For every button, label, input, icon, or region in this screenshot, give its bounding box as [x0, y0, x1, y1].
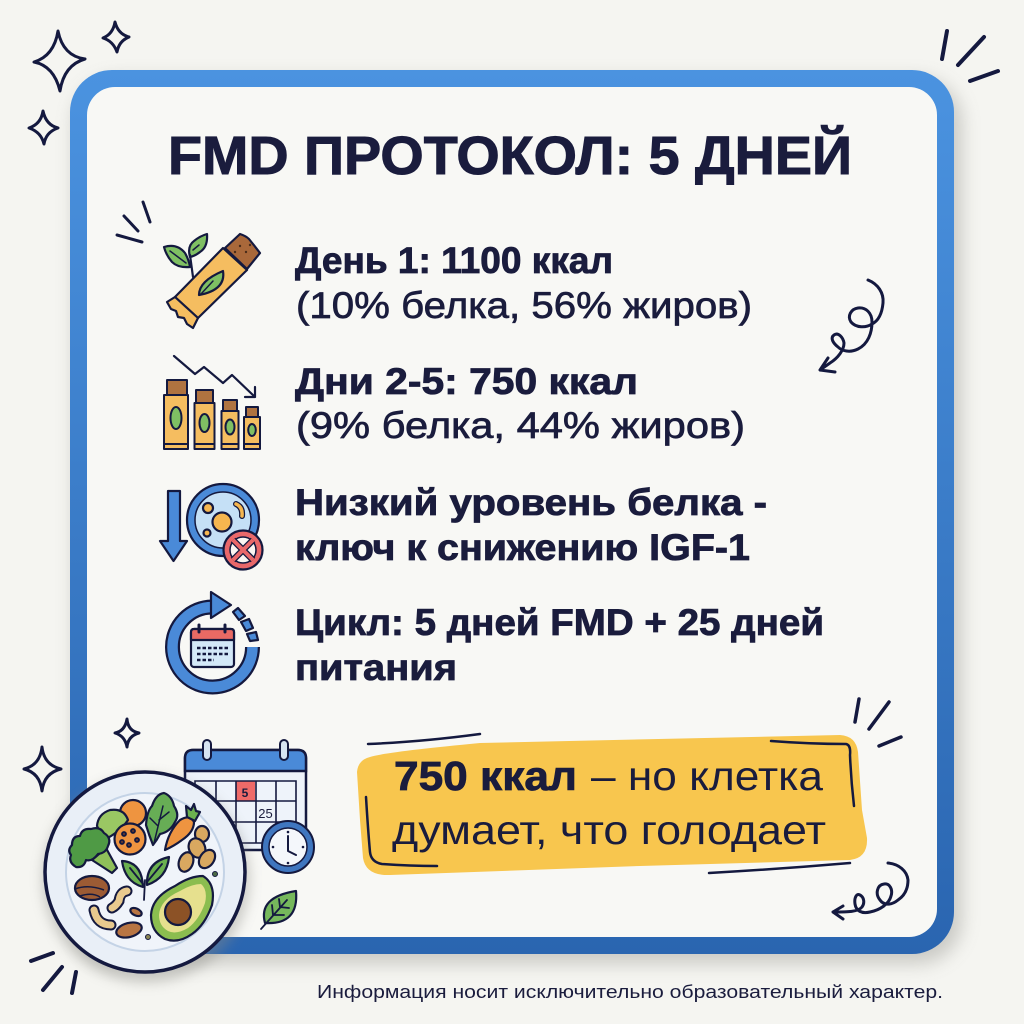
decoration: burst lower left [31, 953, 76, 993]
food: carrot slices and broccoli [69, 800, 146, 873]
icon: snack bar with leaf [164, 234, 260, 328]
food: central leaves [122, 857, 169, 900]
text: low protein: Низкий уровень белка - [295, 482, 767, 523]
callout: highlighted message: думает, что голодает [392, 807, 826, 853]
icon: small leaf [261, 891, 296, 929]
food: beans [176, 826, 218, 874]
icon: wall calendar with clock: 25 [258, 806, 273, 821]
text: days 2-5 [295, 361, 745, 446]
text: days 2-5: Дни 2-5: 750 ккал [295, 361, 638, 402]
decoration: burst near first icon [117, 202, 150, 242]
title: FMD ПРОТОКОЛ: 5 ДНЕЙ [168, 125, 852, 186]
food: leafy green and carrot [146, 793, 200, 850]
icon: descending bars and arrow [164, 356, 260, 449]
callout: highlighted message [357, 734, 867, 875]
decoration: burst near callout [855, 699, 901, 746]
icon: down arrow and cell with cross [160, 484, 262, 570]
text: low protein [295, 482, 767, 568]
icon: wall calendar with clock [185, 740, 314, 873]
food: nuts [75, 872, 218, 940]
text: day 1: День 1: 1100 ккал [295, 240, 613, 281]
icon: plate with food [42, 772, 250, 983]
decoration: sparkles lower left [24, 719, 139, 791]
text: days 2-5: (9% белка, 44% жиров) [296, 405, 745, 446]
decoration: spiral arrow right [820, 280, 883, 372]
footer disclaimer: Информация носит исключительно образовательный характер. [317, 982, 943, 1002]
decoration: sparkles top left [29, 22, 129, 144]
icon: cycle arrow with calendar [172, 592, 258, 687]
text: day 1: (10% белка, 56% жиров) [296, 285, 752, 326]
panel: main card [70, 70, 962, 964]
text: cycle: Цикл: 5 дней FMD + 25 дней [295, 602, 824, 643]
callout: highlighted message: – но клетка [591, 753, 823, 799]
text: day 1 [295, 240, 752, 326]
text: low protein: ключ к снижению IGF-1 [295, 527, 750, 568]
decoration: spiral arrow lower right [833, 863, 908, 919]
decoration: burst top right [942, 31, 998, 81]
callout: highlighted message: 750 ккал [394, 753, 577, 799]
text: cycle: питания [295, 647, 457, 688]
food: avocado [151, 876, 213, 941]
icon: wall calendar with clock: 5 [242, 786, 249, 800]
text: cycle [295, 602, 824, 688]
